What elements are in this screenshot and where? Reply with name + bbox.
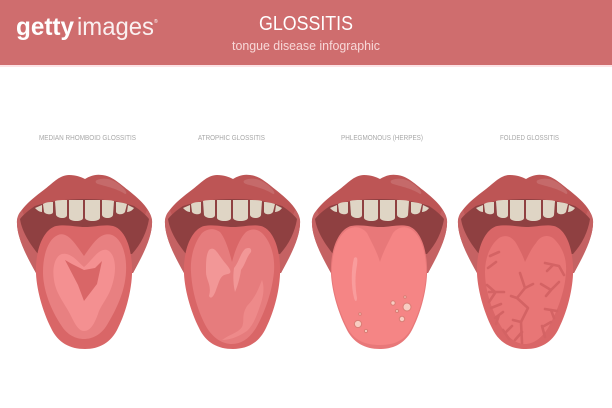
tongue illustration: phlegmonous herpes — [312, 175, 447, 349]
title: GLOSSITIS — [259, 12, 353, 35]
label: folded glossitis: FOLDED GLOSSITIS — [500, 135, 559, 142]
watermark logo: getty — [16, 13, 74, 41]
herpes blisters — [354, 296, 411, 333]
watermark logo: images — [77, 13, 154, 41]
subtitle: tongue disease infographic — [232, 38, 380, 53]
label: median rhomboid glossitis: MEDIAN RHOMBOID GLOSSITIS — [39, 135, 136, 142]
label: atrophic glossitis: ATROPHIC GLOSSITIS — [198, 135, 265, 142]
tongue illustration: atrophic glossitis — [165, 175, 300, 349]
header banner — [0, 0, 612, 67]
tongue illustration: folded glossitis — [458, 175, 593, 349]
watermark logo: ® — [154, 18, 158, 25]
label: phlegmonous herpes: PHLEGMONOUS (HERPES) — [341, 135, 423, 142]
watermark logo — [16, 13, 158, 41]
tongue illustration: median rhomboid glossitis — [17, 175, 152, 349]
